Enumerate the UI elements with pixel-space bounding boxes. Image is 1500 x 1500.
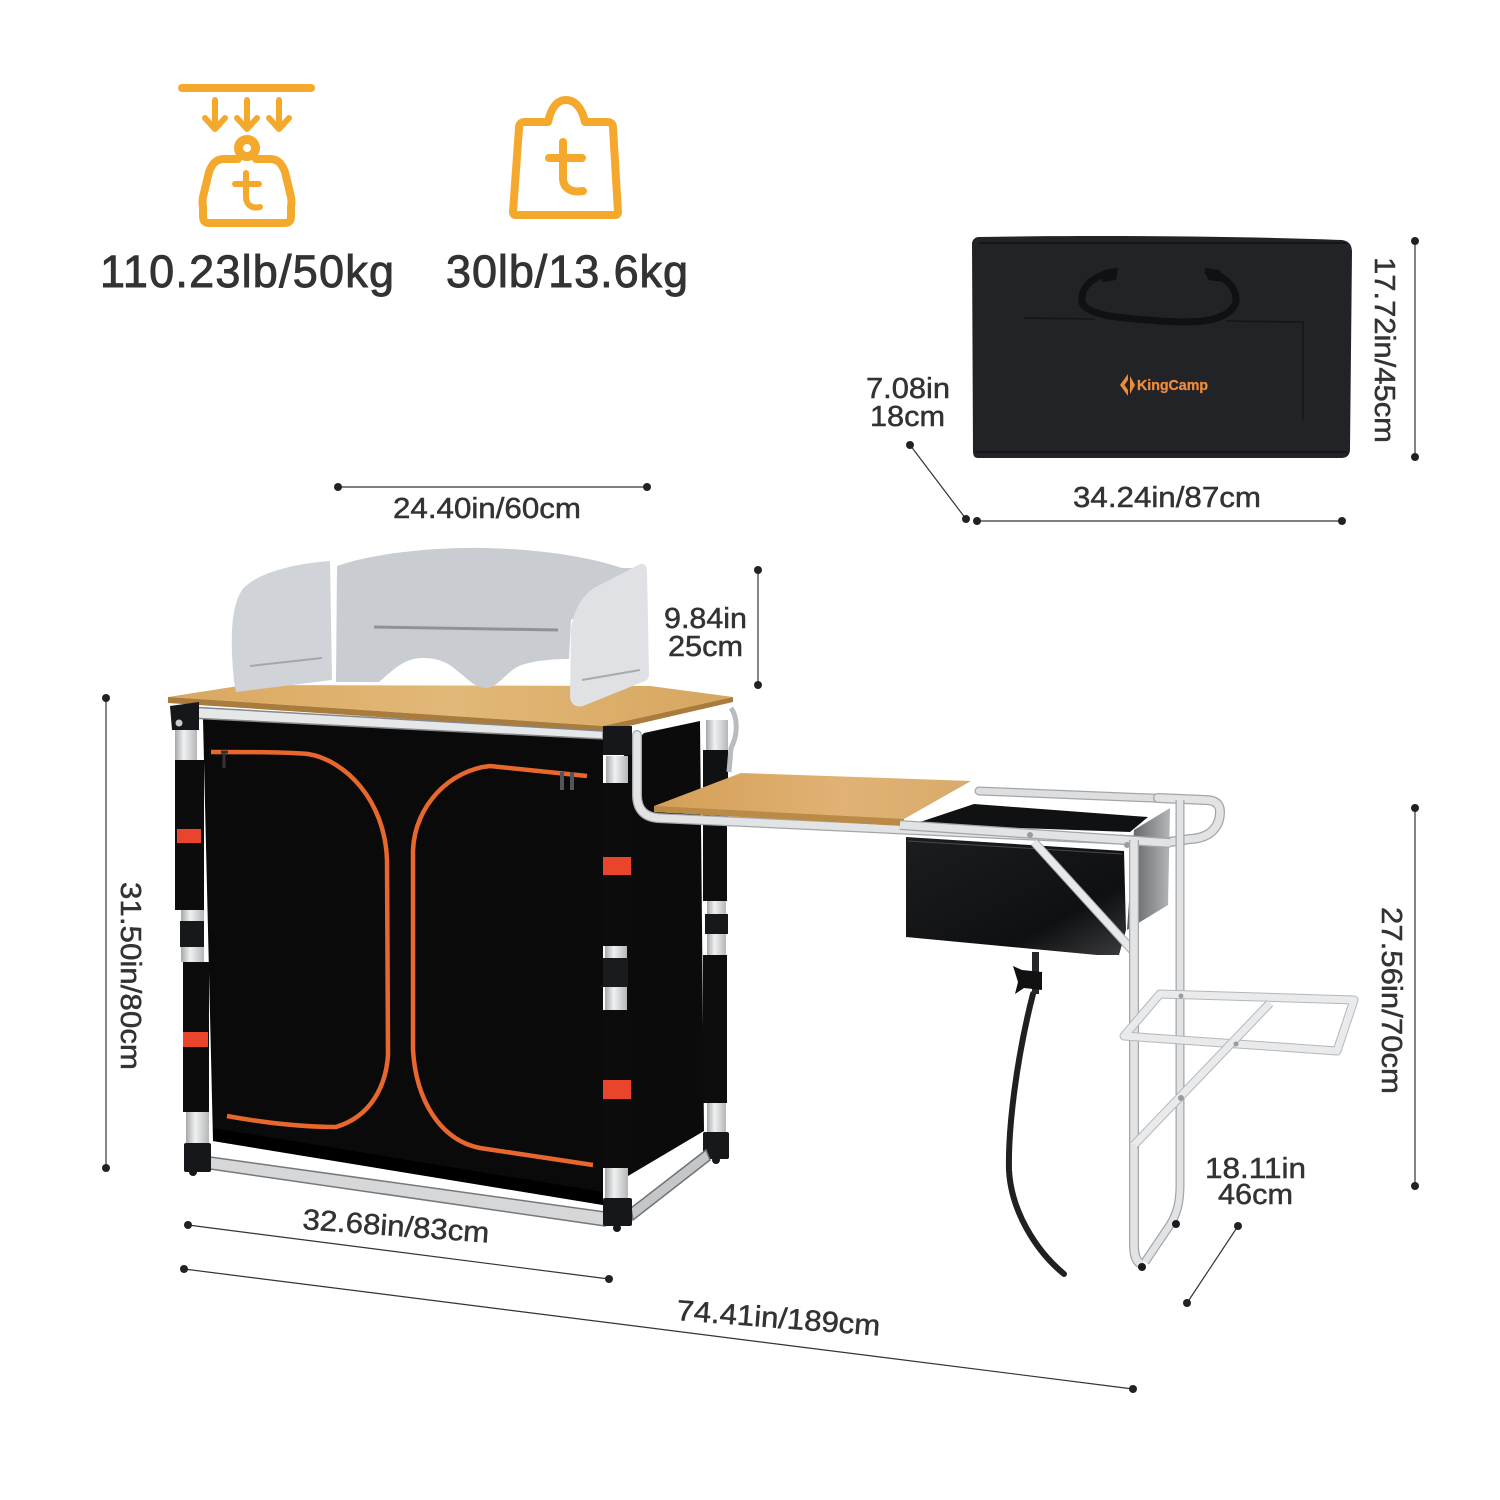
dimension: cabinet width (184, 1204, 613, 1283)
side shelf bamboo board (654, 773, 971, 826)
dimension: windscreen height: 9.84in (664, 603, 747, 635)
centre panel (336, 548, 640, 688)
side panel of cabinet (620, 708, 736, 1176)
feet of frame (1138, 1220, 1180, 1271)
dimension: bag width: 34.24in/87cm (1073, 482, 1261, 514)
front right post (603, 726, 632, 1232)
rear leg of frame (1145, 800, 1180, 1262)
top front rail (190, 707, 603, 739)
windscreen (232, 548, 649, 707)
right wing (570, 564, 649, 707)
drain hose with valve (1009, 952, 1064, 1274)
icon: product weight bag (513, 100, 618, 215)
dimension: shelf height (1375, 804, 1419, 1190)
carry bag with handle and logo: KingCamp (1137, 377, 1208, 394)
dimension: tabletop depth: 24.40in/60cm (393, 493, 581, 525)
label: product weight: 30lb/13.6kg (446, 246, 688, 297)
front leg of frame (1134, 840, 1143, 1264)
dimension: cabinet width: 32.68in/83cm (301, 1204, 490, 1250)
left door zipper (211, 752, 388, 1127)
dimension: frame depth: 46cm (1218, 1179, 1293, 1211)
dimension: cabinet height (102, 694, 146, 1172)
dimension: bag width (973, 482, 1346, 525)
icon: load capacity weight (182, 88, 311, 223)
dimension: total length (180, 1265, 1137, 1393)
label: load capacity: 110.23lb/50kg (100, 246, 394, 297)
carry bag with handle and logo (972, 236, 1352, 458)
bottom front rail (203, 1156, 605, 1226)
dimension: bag depth (866, 373, 970, 523)
wash basin (900, 804, 1170, 955)
dimension: bag depth: 18cm (870, 401, 945, 433)
dimension: frame depth: 18.11in (1205, 1153, 1306, 1185)
dimension: bag depth: 7.08in (866, 373, 950, 405)
tabletop (168, 685, 733, 732)
dimension: cabinet height: 31.50in/80cm (114, 882, 146, 1070)
dimension: windscreen height: 25cm (668, 631, 743, 663)
dimension: shelf height: 27.56in/70cm (1375, 907, 1407, 1094)
side shelf tube frame (637, 735, 1220, 842)
dimension: bag height: 17.72in/45cm (1368, 257, 1400, 443)
left post (170, 702, 211, 1176)
dimension: frame depth (1183, 1153, 1306, 1307)
left wing (232, 561, 332, 692)
fold-out rack (1124, 994, 1354, 1145)
right door zipper (413, 766, 593, 1165)
dimension: total length: 74.41in/189cm (675, 1295, 881, 1343)
dimension: tabletop depth (334, 483, 651, 525)
side base rail (631, 1150, 710, 1220)
dimension: bag height (1368, 237, 1419, 461)
dimension: windscreen height (664, 566, 762, 689)
cabinet front fabric with zipper doors (203, 719, 603, 1205)
